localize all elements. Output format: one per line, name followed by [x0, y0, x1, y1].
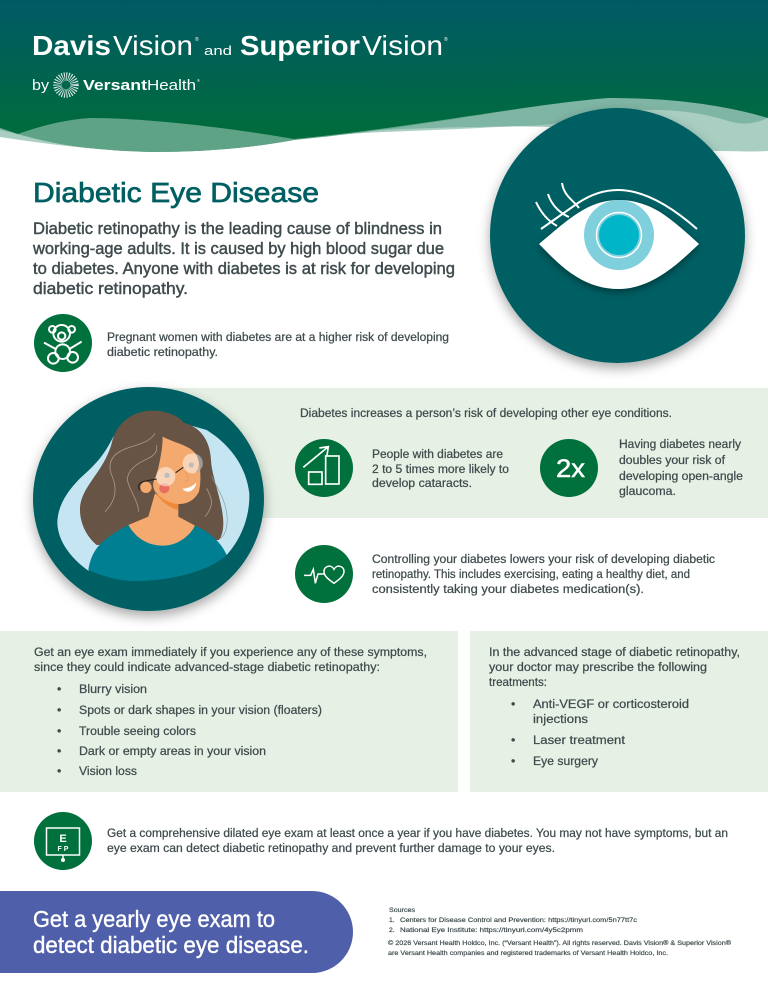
- icon: eye chart: E: [59, 833, 67, 845]
- panel: treatments: treatments:: [489, 675, 547, 689]
- intro paragraph: diabetic retinopathy.: [33, 279, 188, 298]
- panel: treatments: [470, 631, 768, 792]
- treatment list: Laser treatment: [533, 733, 626, 747]
- icon: heart with pulse: [295, 545, 353, 603]
- symptom list: Dark or empty areas in your vision: [79, 744, 266, 758]
- logo: Davis Vision and Superior Vision: ®: [195, 36, 199, 43]
- pregnancy risk text: Pregnant women with diabetes are at a higher risk of developing: [107, 330, 449, 344]
- sources and copyright: Centers for Disease Control and Prevention: https://tinyurl.com/5n77tt7c: [400, 917, 638, 924]
- glaucoma text: Having diabetes nearly: [619, 437, 742, 451]
- symptom list: •: [57, 703, 61, 717]
- diabetes control text: consistently taking your diabetes medication(s).: [372, 582, 644, 596]
- sources and copyright: © 2026 Versant Health Holdco, Inc. (“Versant Health”). All rights reserved. Davis Vision® & Superior Vision®: [388, 939, 731, 947]
- panel: treatments: In the advanced stage of diabetic retinopathy,: [489, 645, 740, 659]
- panel: symptoms: since they could indicate advanced-stage diabetic retinopathy:: [34, 660, 380, 674]
- logo: Davis Vision and Superior Vision: Vision: [362, 30, 443, 61]
- logo: Davis Vision and Superior Vision: Vision: [113, 30, 193, 61]
- cataracts text: 2 to 5 times more likely to: [372, 462, 509, 476]
- woman portrait medallion: [33, 387, 264, 611]
- symptom list: Vision loss: [79, 764, 137, 778]
- icon: teddy bear: [34, 314, 92, 372]
- intro paragraph: [32, 219, 455, 298]
- symptom list: Spots or dark shapes in your vision (floaters): [79, 703, 322, 717]
- symptom list: •: [57, 764, 61, 778]
- icon: eye: [536, 183, 699, 289]
- panel: other eye conditions: [150, 388, 768, 518]
- sources and copyright: Sources: [389, 907, 416, 914]
- icon: eye chart: [34, 812, 92, 870]
- logo: by Versant Health: [32, 76, 200, 94]
- logo: Davis Vision and Superior Vision: [32, 30, 448, 61]
- icon: 2x: [540, 439, 598, 497]
- logo: by Versant Health: by: [32, 77, 50, 94]
- symptom list: Trouble seeing colors: [79, 724, 196, 738]
- intro paragraph: to diabetes. Anyone with diabetes is at risk for developing: [33, 259, 455, 278]
- panel heading: other eye conditions: Diabetes increases a person’s risk of developing other eye conditions.: [300, 406, 672, 420]
- title: Diabetic Eye Disease: [33, 177, 319, 208]
- sources and copyright: 1.: [389, 917, 395, 924]
- treatment list: Eye surgery: [533, 754, 599, 768]
- treatment list: •: [511, 733, 515, 747]
- intro paragraph: Diabetic retinopathy is the leading cause of blindness in: [33, 219, 442, 238]
- pregnancy risk text: [107, 330, 449, 359]
- diabetes control text: Controlling your diabetes lowers your risk of developing diabetic: [372, 552, 715, 566]
- icon: 2x: 2x: [556, 455, 586, 483]
- logo: Davis Vision and Superior Vision: and: [204, 43, 232, 58]
- intro paragraph: working-age adults. It is caused by high blood sugar due: [32, 239, 444, 258]
- pregnancy risk text: diabetic retinopathy.: [107, 345, 218, 359]
- panel: treatments: your doctor may prescribe the following: [489, 660, 707, 674]
- logo: by Versant Health: Versant: [83, 77, 147, 94]
- sources and copyright: 2.: [389, 927, 395, 934]
- treatment list: •: [511, 754, 515, 768]
- symptom list: •: [57, 682, 61, 696]
- callout: call to action: [0, 891, 353, 973]
- diabetes control text: [372, 552, 715, 596]
- glaucoma text: [619, 437, 743, 498]
- logo: by Versant Health: Health: [147, 77, 196, 94]
- logo: by Versant Health: ®: [197, 78, 200, 83]
- symptom list: •: [57, 744, 61, 758]
- cataracts text: develop cataracts.: [372, 476, 472, 490]
- annual exam text: [107, 826, 728, 855]
- sources and copyright: are Versant Health companies and registered trademarks of Versant Health Holdco, Inc.: [388, 950, 668, 957]
- icon: rising bar chart: [295, 439, 353, 497]
- icon: eye chart: F P: [58, 846, 69, 853]
- symptom list: •: [57, 724, 61, 738]
- eye medallion: [490, 108, 745, 363]
- sources and copyright: National Eye Institute: https://tinyurl.com/4y5c2pmm: [400, 927, 583, 934]
- symptom list: Blurry vision: [79, 682, 147, 696]
- symptom list: [57, 682, 322, 778]
- glaucoma text: developing open-angle: [619, 469, 743, 483]
- glaucoma text: glaucoma.: [619, 484, 676, 498]
- callout: call to action: detect diabetic eye disease.: [33, 932, 309, 958]
- annual exam text: eye exam can detect diabetic retinopathy and prevent further damage to your eyes.: [107, 841, 555, 855]
- sources and copyright: [388, 907, 731, 957]
- cataracts text: [372, 447, 509, 490]
- diabetes control text: retinopathy. This includes exercising, eating a healthy diet, and: [372, 567, 690, 581]
- treatment list: •: [511, 697, 515, 711]
- panel: symptoms: Get an eye exam immediately if you experience any of these symptoms,: [34, 645, 427, 659]
- cataracts text: People with diabetes are: [372, 447, 503, 461]
- logo: Davis Vision and Superior Vision: Superior: [240, 30, 360, 61]
- header banner with waves: [0, 0, 768, 152]
- panel: symptoms: [0, 631, 458, 792]
- logo: Davis Vision and Superior Vision: Davis: [32, 30, 111, 61]
- treatment list: Anti-VEGF or corticosteroid: [533, 697, 689, 711]
- logo: Davis Vision and Superior Vision: ®: [444, 36, 448, 43]
- treatment list: [511, 697, 689, 768]
- treatment list: injections: [533, 712, 588, 726]
- annual exam text: Get a comprehensive dilated eye exam at least once a year if you have diabetes. You may not have symptoms, but an: [107, 826, 728, 840]
- glaucoma text: doubles your risk of: [619, 453, 726, 467]
- callout: call to action: Get a yearly eye exam to: [33, 906, 275, 932]
